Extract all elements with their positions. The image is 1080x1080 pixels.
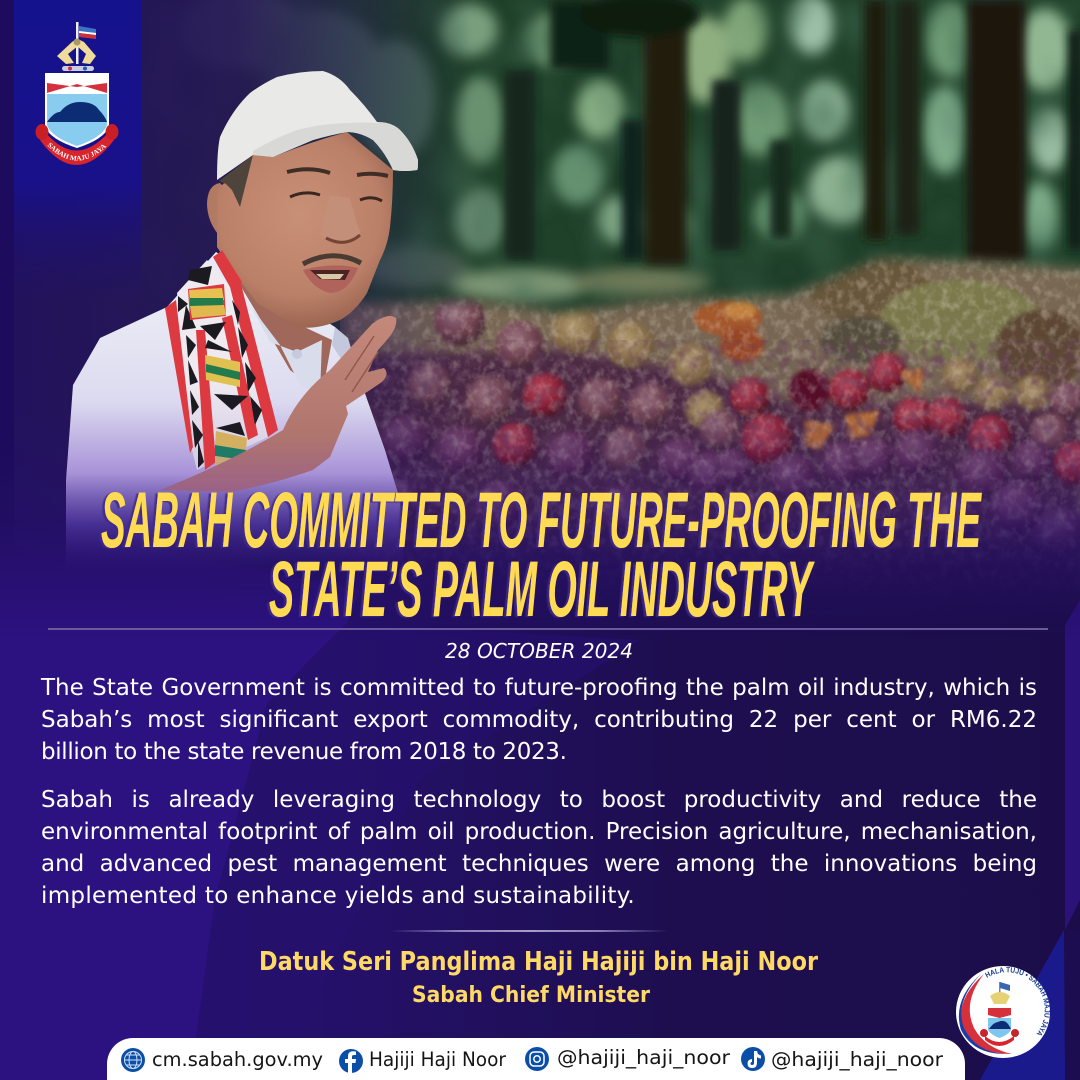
minister name and title: Sabah Chief Minister [412,983,650,1008]
date: 28 OCTOBER 2024 [445,639,633,663]
hair [219,155,253,207]
blue side band [0,0,142,560]
facial features [287,169,388,293]
paragraph two [41,787,1037,909]
paragraph one: The State Government is committed to future-proofing the palm oil industry, which is [41,675,1037,701]
paragraph two: environmental footprint of palm oil production. Precision agriculture, mechanisation, [41,819,1037,845]
paragraph two: Sabah is already leveraging technology to boost productivity and reduce the [41,787,1037,813]
instagram: @hajiji_haji_noor [557,1046,731,1069]
emblem mini crest [980,982,1019,1046]
headline rule [48,628,1048,630]
light foliage [180,0,1073,301]
neck [222,255,332,395]
tiktok: @hajiji_haji_noor [771,1048,944,1071]
paragraph one: Sabah’s most significant export commodity, contributing 22 per cent or RM6.22 [41,707,1037,733]
paragraph one [40,675,1037,765]
crest ribbon motto: SABAH MAJU JAYA [48,142,106,161]
lower polygon panel [0,520,1080,1080]
emblem motto ring: HALA TUJU • SABAH MAJU JAYA [984,967,1050,1036]
white cap [217,71,418,180]
facebook: Hajiji Haji Noor [369,1048,507,1071]
headline [100,475,982,633]
ear [207,183,236,244]
palm trunks [505,0,1080,265]
shirt [66,252,405,575]
emblem swoosh [961,974,1012,1054]
paragraph two: implemented to enhance yields and sustainability. [41,883,635,909]
signature divider [390,930,668,932]
Sabah state crest [36,22,118,165]
foliage shadow texture [140,0,1080,300]
face [217,132,393,328]
collar and button [252,308,362,395]
website: cm.sabah.gov.my [152,1048,323,1071]
crest arms [57,38,96,71]
crest shield [45,73,109,148]
scarf [165,250,278,470]
crest ribbon motto [36,124,118,165]
palm fruit pile [340,250,1080,569]
raised hand and arm [160,316,396,492]
paragraph one: billion to the state revenue from 2018 to 2023. [41,739,567,765]
crest flag [76,22,96,64]
minister name and title: Datuk Seri Panglima Haji Hajiji bin Haji Noor [259,947,818,977]
paragraph two: and advanced pest management techniques were among the innovations being [41,851,1037,877]
